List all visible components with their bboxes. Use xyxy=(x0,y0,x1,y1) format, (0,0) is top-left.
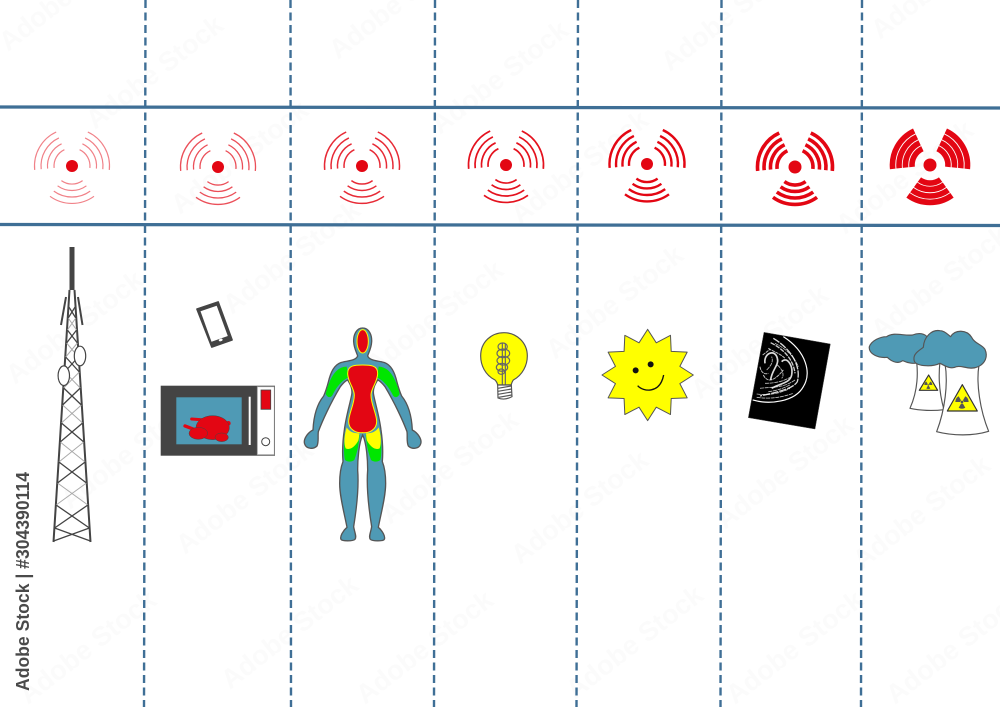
icon: smartphone xyxy=(197,302,232,347)
body silhouette xyxy=(304,328,421,541)
text: Adobe Stock xyxy=(217,194,367,320)
text: Adobe Stock xyxy=(710,409,860,535)
watermark credit: Adobe Stock | #304390114 xyxy=(12,471,33,691)
text: Adobe Stock xyxy=(360,254,510,380)
back cloud xyxy=(869,334,930,363)
text: Adobe Stock xyxy=(685,279,835,405)
radiation symbol 6 xyxy=(757,133,833,204)
radiation symbol 1: faintest xyxy=(34,132,110,203)
text: Adobe Stock xyxy=(505,444,655,570)
icon: smiling sun xyxy=(602,329,693,421)
icon: radio tower xyxy=(54,247,90,542)
text: Adobe Stock xyxy=(350,584,500,707)
icon: x-ray image xyxy=(748,332,830,429)
text: Adobe Stock xyxy=(847,449,997,575)
text: Adobe Stock xyxy=(540,239,690,365)
front cloud xyxy=(914,331,986,368)
radiation symbol 7: strongest xyxy=(892,131,968,202)
text: Adobe Stock xyxy=(830,114,980,240)
microwave contents: chicken xyxy=(185,416,231,442)
text: Adobe Stock xyxy=(720,584,870,707)
text: Adobe Stock xyxy=(0,264,150,390)
text: Adobe Stock xyxy=(80,9,230,135)
radiation symbol 4 xyxy=(468,131,544,202)
radiation symbol 3 xyxy=(324,132,400,203)
icon: human body heat map xyxy=(304,328,421,541)
icon: nuclear cooling towers xyxy=(869,331,989,435)
text: Adobe Stock xyxy=(165,94,315,220)
icon: microwave oven xyxy=(161,386,275,456)
text: Adobe Stock xyxy=(560,579,710,705)
text: Adobe Stock xyxy=(55,389,205,515)
front tower xyxy=(937,363,989,435)
back tower xyxy=(910,362,944,410)
icon: light bulb xyxy=(481,333,527,399)
text: Adobe Stock xyxy=(425,14,575,140)
text: Adobe Stock xyxy=(215,569,365,695)
text: Adobe Stock xyxy=(505,104,655,230)
radiation symbol 2 xyxy=(180,133,256,204)
text: Adobe Stock xyxy=(13,584,163,707)
radiation symbol 5 xyxy=(609,130,685,201)
text: Adobe Stock xyxy=(375,404,525,530)
text: Adobe Stock xyxy=(170,434,320,560)
